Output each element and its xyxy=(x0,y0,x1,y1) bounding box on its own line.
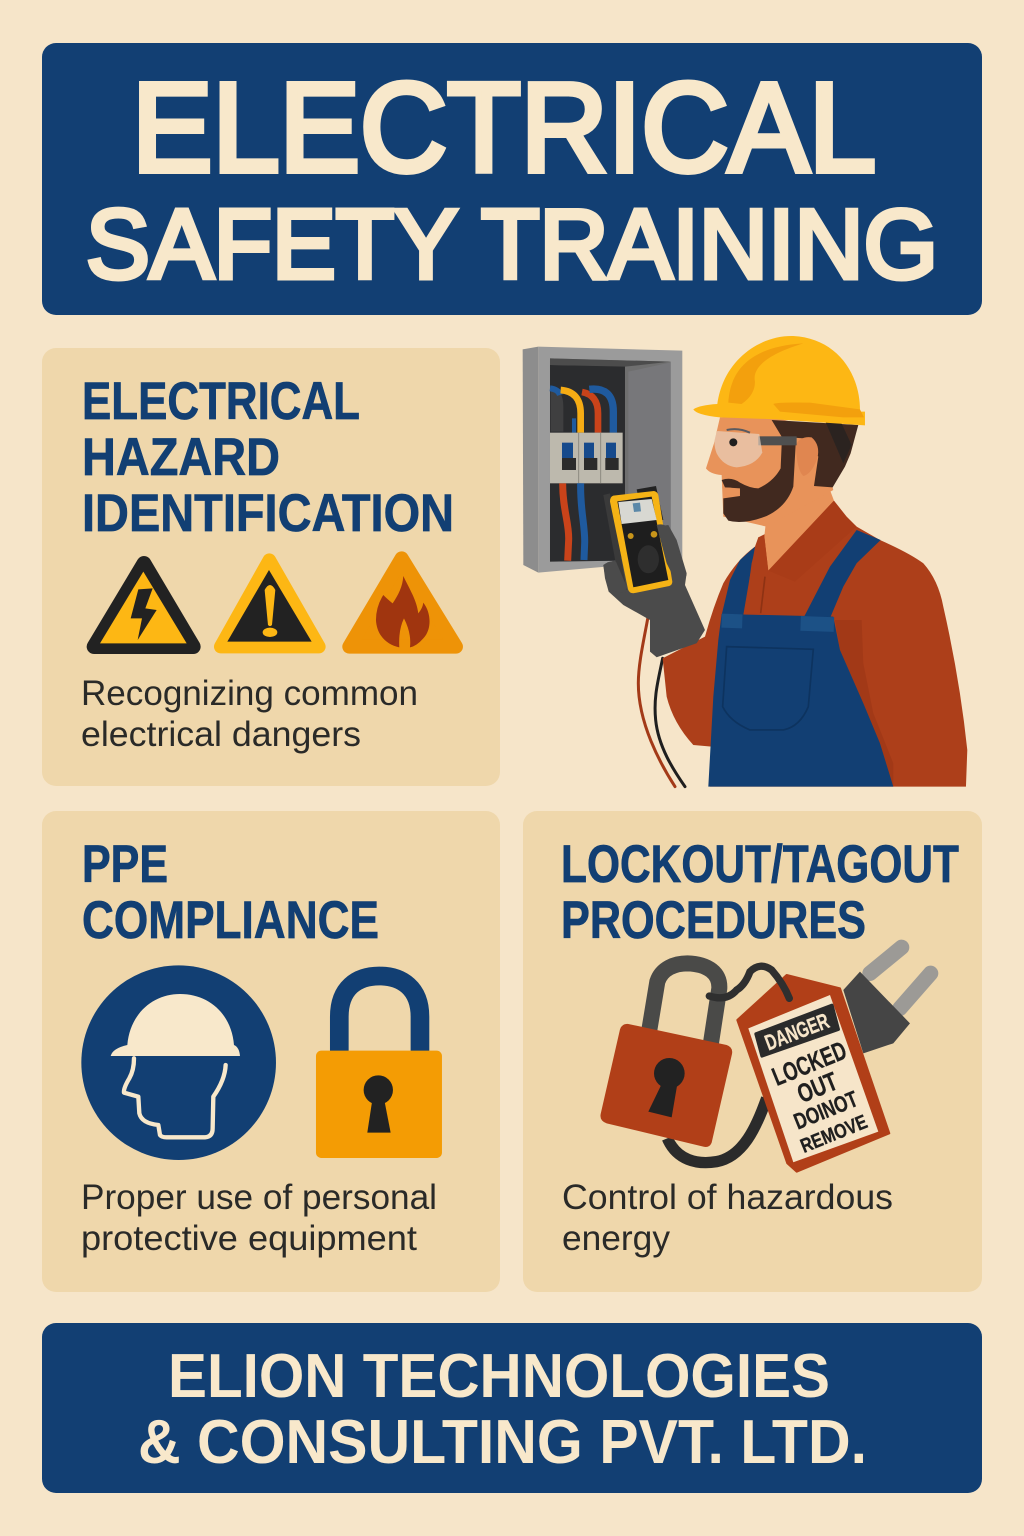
footer banner xyxy=(42,1323,982,1493)
hard hat xyxy=(693,336,865,425)
danger tag: REMOVE xyxy=(797,1111,871,1158)
danger tag: DOINOT xyxy=(790,1085,862,1134)
neck and collar xyxy=(745,490,857,613)
danger tag xyxy=(737,975,889,1172)
danger tag: OUT xyxy=(793,1066,842,1109)
heading: PPE compliance: COMPLIANCE xyxy=(82,891,379,950)
heading: PPE compliance xyxy=(82,835,379,950)
footer banner: & CONSULTING PVT. LTD. xyxy=(138,1408,867,1477)
footer banner: ELION TECHNOLOGIES xyxy=(168,1342,830,1411)
title banner: ELECTRICAL xyxy=(132,57,876,198)
overalls xyxy=(708,530,893,787)
heading: hazard identification: HAZARD xyxy=(82,428,280,487)
title banner: SAFETY TRAINING xyxy=(86,189,938,299)
panel: lockout/tagout procedures xyxy=(523,811,982,1292)
danger tag: LOCKED xyxy=(768,1035,851,1092)
icon: yellow padlock xyxy=(316,976,442,1158)
text: PPE description xyxy=(81,1178,437,1258)
glove and multimeter xyxy=(603,486,705,657)
safety glasses xyxy=(714,429,797,467)
danger tag: DANGER xyxy=(761,1008,833,1055)
text: hazard description xyxy=(81,674,418,754)
shirt and torso xyxy=(663,501,967,787)
panel: PPE compliance xyxy=(42,811,500,1292)
heading: lockout/tagout procedures: PROCEDURES xyxy=(561,891,866,950)
electrical panel box xyxy=(523,347,682,573)
plug xyxy=(843,947,931,1053)
text: PPE description: protective equipment xyxy=(81,1219,417,1258)
head and beard xyxy=(706,417,858,527)
text: lockout description xyxy=(562,1178,893,1258)
lock body xyxy=(600,1024,732,1147)
title banner xyxy=(42,43,982,315)
cable xyxy=(667,1098,767,1163)
icon: padlock with danger tag and plug xyxy=(600,947,931,1172)
panel: electrical hazard identification xyxy=(42,348,500,786)
heading: lockout/tagout procedures xyxy=(561,835,959,950)
heading: hazard identification: ELECTRICAL xyxy=(82,372,360,431)
test leads xyxy=(638,592,685,787)
heading: PPE compliance: PPE xyxy=(82,835,168,894)
text: hazard description: electrical dangers xyxy=(81,715,361,754)
text: PPE description: Proper use of personal xyxy=(81,1178,437,1217)
illustration: electrician testing a panel xyxy=(523,336,967,787)
tie wire xyxy=(709,966,789,998)
icon: hazard warning triangles xyxy=(94,558,456,647)
text: lockout description: Control of hazardous xyxy=(562,1178,893,1217)
heading: hazard identification: IDENTIFICATION xyxy=(82,484,454,543)
text: hazard description: Recognizing common xyxy=(81,674,418,713)
heading: hazard identification xyxy=(82,372,454,543)
shackle xyxy=(649,963,719,1045)
text: lockout description: energy xyxy=(562,1219,670,1258)
icon: hard hat required sign xyxy=(81,965,276,1160)
